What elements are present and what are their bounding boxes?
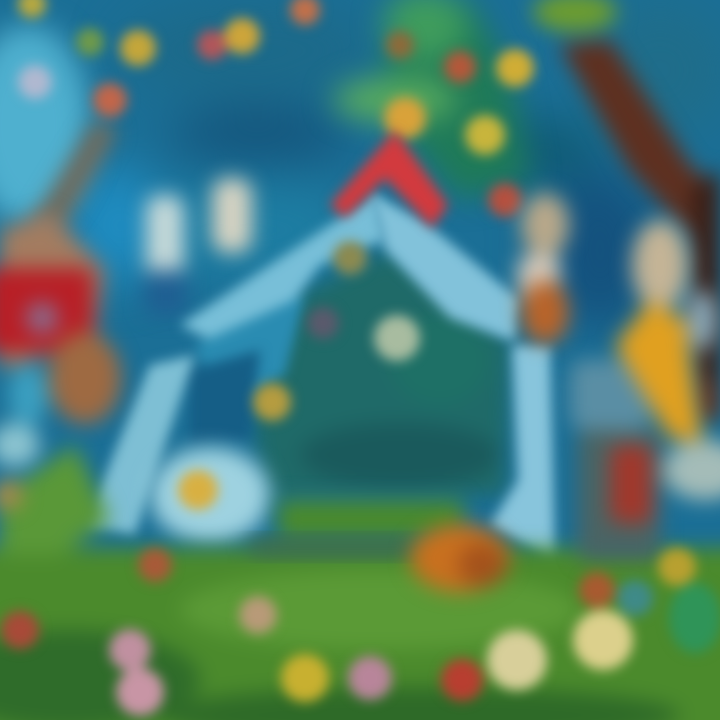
tent front panel with flower <box>150 447 270 543</box>
tent hanging ornaments <box>253 241 420 421</box>
tent right leg <box>490 345 555 562</box>
tree ornaments <box>384 31 534 217</box>
string of ornaments top left <box>18 0 320 117</box>
orange pumpkin-like object <box>410 524 510 592</box>
tent roof left <box>180 195 385 410</box>
yellow flower on panel <box>178 470 218 510</box>
tent interior <box>250 250 510 495</box>
tent left leg and flap <box>85 350 260 535</box>
child in yellow dress on right <box>570 220 720 560</box>
background figures in white and blue <box>145 178 252 315</box>
light blue blob upper left <box>0 25 90 225</box>
green tree top centre <box>333 0 530 200</box>
grass <box>0 445 720 720</box>
tree trunk right <box>533 0 720 420</box>
tent red peak <box>330 130 448 228</box>
scattered flowers on grass <box>1 548 720 716</box>
branch upper left <box>30 120 118 235</box>
child with orange scarf by tent <box>518 193 569 344</box>
grey shadow under tent <box>250 538 420 556</box>
tent roof right <box>370 192 520 342</box>
red character on left <box>0 212 121 509</box>
